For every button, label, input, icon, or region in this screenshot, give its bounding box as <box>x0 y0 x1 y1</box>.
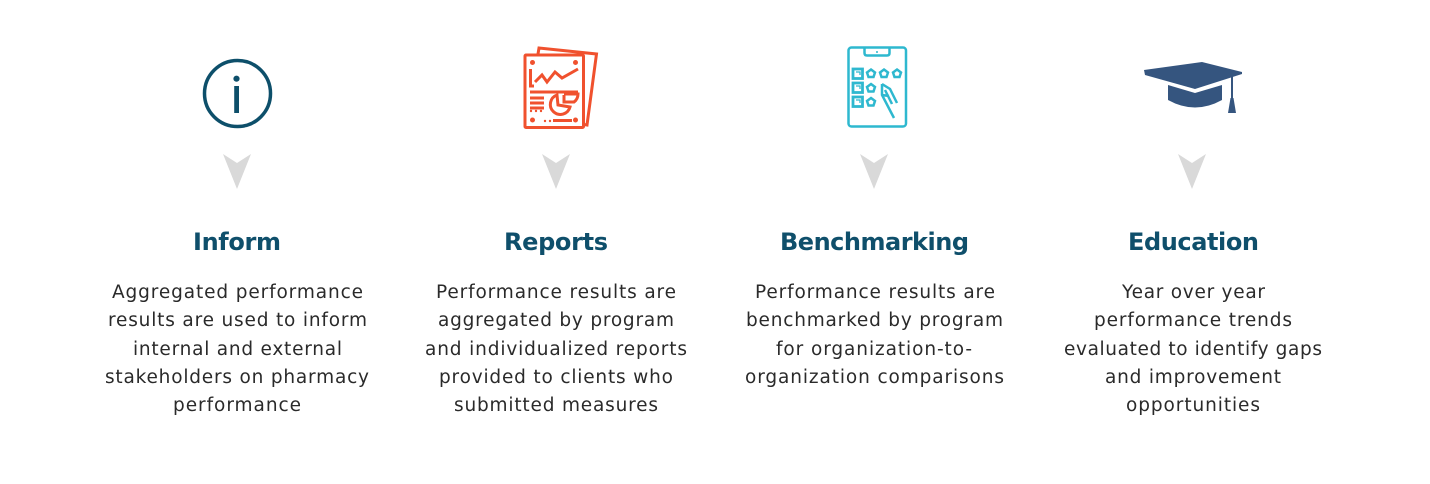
icon: information circle <box>204 60 270 126</box>
text block: Inform description: internal and external <box>133 339 342 360</box>
text block: Reports description: provided to clients who <box>439 367 673 388</box>
text block: Benchmarking description <box>745 282 1004 388</box>
heading: Education: Education <box>1128 228 1259 256</box>
icon: clipboard checklist with pen <box>848 48 906 126</box>
text block: Inform description: results are used to inform <box>108 310 367 331</box>
icon: graduation cap <box>1144 62 1242 113</box>
text block: Reports description: and individualized reports <box>425 339 687 360</box>
text block: Inform description: stakeholders on pharmacy <box>105 367 369 388</box>
heading: Inform: Inform <box>193 228 281 256</box>
text block: Inform description: Aggregated performance <box>112 282 363 303</box>
text block: Education description: and improvement <box>1105 367 1281 388</box>
heading: Reports: Reports <box>504 228 608 256</box>
text block: Inform description <box>105 282 369 416</box>
arrow: down <box>223 154 251 189</box>
icon: report pages with charts <box>525 48 596 128</box>
text block: Education description: evaluated to identify gaps <box>1064 339 1322 360</box>
text block: Inform description: performance <box>173 395 301 416</box>
arrow: down <box>860 154 888 189</box>
heading: Benchmarking: Benchmarking <box>780 228 969 256</box>
panel: Inform <box>105 60 369 416</box>
panel: Benchmarking <box>745 48 1004 388</box>
text block: Benchmarking description: for organization-to- <box>776 339 972 360</box>
text block: Education description: Year over year <box>1121 282 1265 303</box>
text block: Benchmarking description: organization comparisons <box>745 367 1004 388</box>
text block: Reports description <box>425 282 687 416</box>
arrow: down <box>542 154 570 189</box>
text block: Benchmarking description: Performance results are <box>755 282 995 303</box>
panel: Reports <box>425 48 687 416</box>
text block: Education description: opportunities <box>1126 395 1260 416</box>
text block: Reports description: Performance results are <box>436 282 676 303</box>
text block: Benchmarking description: benchmarked by program <box>746 310 1003 331</box>
text block: Education description <box>1064 282 1322 416</box>
panel: Education <box>1064 62 1322 416</box>
text block: Reports description: submitted measures <box>454 395 658 416</box>
arrow: down <box>1178 154 1206 189</box>
text block: Education description: performance trends <box>1094 310 1292 331</box>
text block: Reports description: aggregated by program <box>438 310 674 331</box>
